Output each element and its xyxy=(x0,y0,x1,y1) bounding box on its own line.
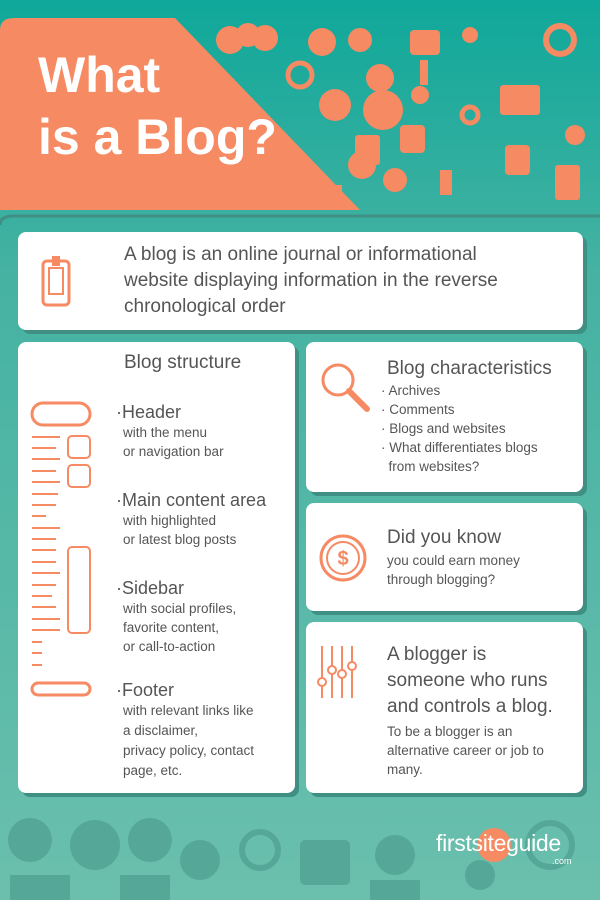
item: footer: privacy policy, contact xyxy=(123,743,254,758)
heading xyxy=(387,644,553,717)
logo: firstsiteguide xyxy=(436,828,572,866)
background icons top xyxy=(216,23,585,200)
text: through blogging? xyxy=(387,572,495,587)
icon: sliders xyxy=(317,646,357,698)
panel: blogger xyxy=(306,622,583,793)
title: is a Blog? xyxy=(38,109,277,165)
title xyxy=(38,47,277,165)
definition text xyxy=(124,244,498,317)
item: sidebar: ·Sidebar xyxy=(116,578,184,598)
title: What xyxy=(38,47,160,103)
list: · Comments xyxy=(381,402,455,417)
item: footer: with relevant links like xyxy=(123,703,254,718)
definition text: website displaying information in the reverse xyxy=(124,270,498,291)
list xyxy=(381,383,538,474)
item: main content: with highlighted xyxy=(123,513,216,528)
icon: page layout xyxy=(30,402,92,696)
item: header: with the menu xyxy=(123,425,207,440)
list: · Blogs and websites xyxy=(381,421,506,436)
panel: blog structure xyxy=(18,342,295,793)
heading: Did you know xyxy=(387,527,501,548)
item: sidebar: or call-to-action xyxy=(123,639,215,654)
heading: someone who runs xyxy=(387,670,548,691)
item: footer: a disclaimer, xyxy=(123,723,198,738)
item: main content: or latest blog posts xyxy=(123,532,236,547)
item: main content: ·Main content area xyxy=(116,490,266,510)
heading: and controls a blog. xyxy=(387,696,553,717)
heading: Blog structure xyxy=(124,352,241,373)
item: sidebar: favorite content, xyxy=(123,620,219,635)
list: · Archives xyxy=(381,383,440,398)
icon: magnifier xyxy=(322,364,370,412)
heading: A blogger is xyxy=(387,644,486,665)
list: from websites? xyxy=(388,459,479,474)
panel: definition xyxy=(18,232,583,330)
title banner xyxy=(0,18,600,225)
item: footer: ·Footer xyxy=(116,680,174,700)
icon: phone xyxy=(42,256,70,306)
item: main content xyxy=(116,490,266,547)
text: To be a blogger is an xyxy=(387,724,512,739)
text: you could earn money xyxy=(387,553,520,568)
item: footer xyxy=(116,680,254,778)
icon: coin: $ xyxy=(337,548,349,570)
item: header: ·Header xyxy=(116,402,181,422)
item: sidebar: with social profiles, xyxy=(123,601,236,616)
text xyxy=(387,724,544,777)
logo: firstsiteguide: firstsiteguide xyxy=(436,830,561,856)
panel: did you know xyxy=(306,503,583,611)
icon: coin xyxy=(320,534,366,582)
text xyxy=(387,553,520,587)
panel: characteristics xyxy=(306,342,583,492)
text: alternative career or job to xyxy=(387,743,544,758)
item: sidebar xyxy=(116,578,236,654)
background icons bottom xyxy=(8,818,575,900)
text: many. xyxy=(387,762,423,777)
item: header: or navigation bar xyxy=(123,444,224,459)
item: footer: page, etc. xyxy=(123,763,182,778)
heading: Blog characteristics xyxy=(387,358,552,379)
logo: firstsiteguide: .com xyxy=(552,856,572,866)
item: header xyxy=(116,402,224,459)
definition text: chronological order xyxy=(124,296,286,317)
list: · What differentiates blogs xyxy=(381,440,538,455)
definition text: A blog is an online journal or informational xyxy=(124,244,477,265)
